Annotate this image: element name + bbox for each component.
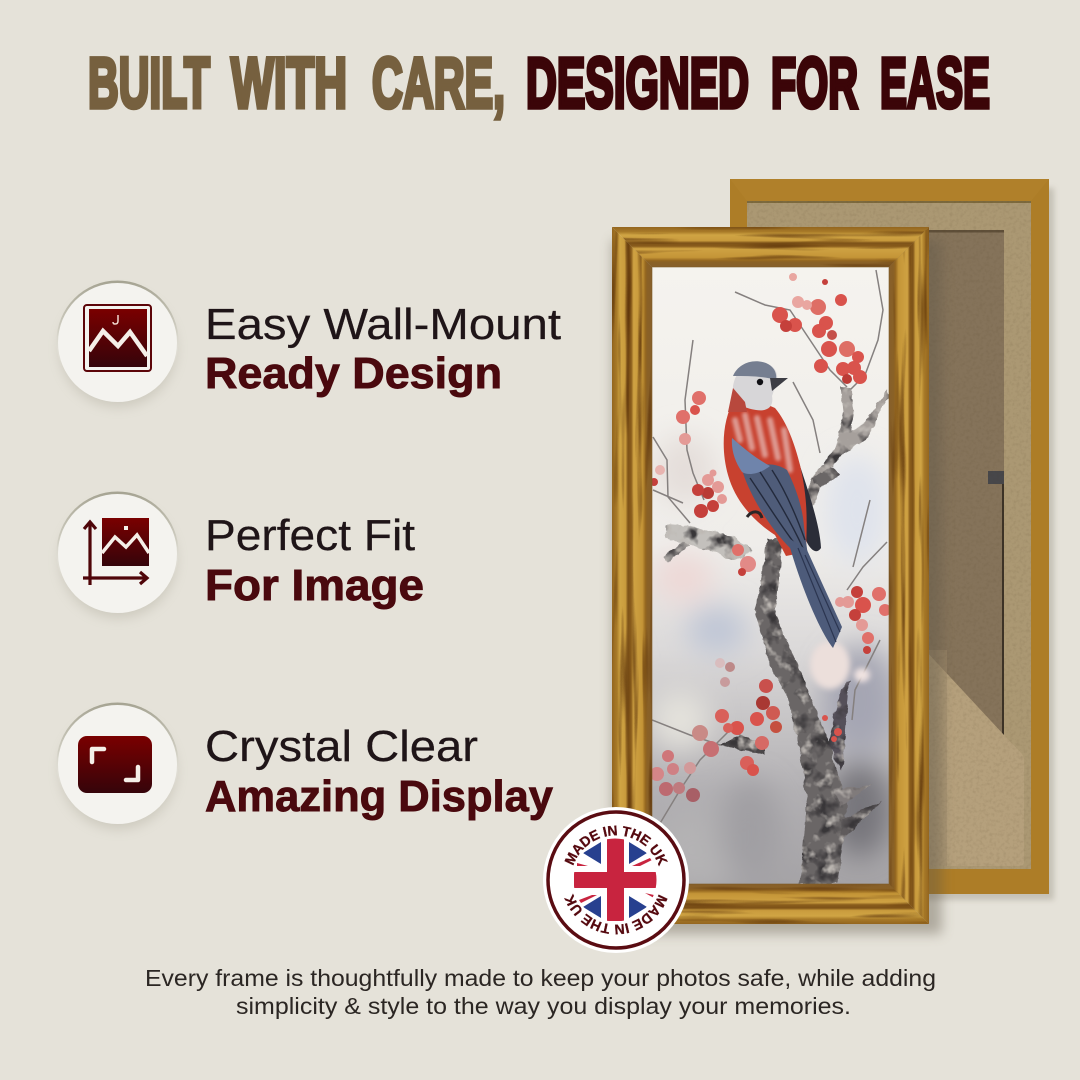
feature: easy wall-mount <box>56 280 561 407</box>
turn clip <box>988 471 1004 484</box>
red berries <box>650 273 891 802</box>
label: ready design: Ready Design <box>205 349 502 398</box>
dark long feather <box>800 466 821 552</box>
back of frame <box>730 179 1054 900</box>
feature: crystal clear <box>56 702 554 829</box>
painting: bird on a berry branch <box>650 267 898 890</box>
front frame with painting <box>612 227 942 934</box>
badge text top: MADE IN THE UK <box>564 825 668 866</box>
icon: image with dimension arrows <box>56 492 178 618</box>
red body <box>724 395 807 556</box>
watercolour washes <box>650 435 898 890</box>
title: BUILT <box>88 45 210 124</box>
painting inner shadow <box>652 267 889 884</box>
title: FOR <box>771 45 858 124</box>
icon: clear display screen <box>56 702 178 829</box>
title <box>88 45 990 124</box>
blue wings <box>743 464 808 556</box>
caption: simplicity & style to the way you display your memories. <box>236 993 851 1019</box>
title: WITH <box>231 45 347 124</box>
flap stand <box>925 650 1024 866</box>
tree trunk and branches <box>663 387 889 884</box>
wooden frame <box>612 227 929 924</box>
backing board <box>747 201 1031 869</box>
pale blossoms <box>810 641 870 689</box>
thin twigs <box>650 270 887 840</box>
label: perfect fit: Perfect Fit <box>205 511 415 560</box>
bird <box>724 361 842 648</box>
title: DESIGNED <box>526 45 749 124</box>
union flag <box>574 838 657 921</box>
badge text bottom: MADE IN THE UK <box>564 894 668 935</box>
label: easy wall-mount: Easy Wall-Mount <box>205 300 561 349</box>
caption: Every frame is thoughtfully made to keep your photos safe, while adding <box>145 965 936 991</box>
title: CARE, <box>372 45 505 124</box>
label: amazing display: Amazing Display <box>205 772 554 821</box>
tail <box>787 537 842 648</box>
label: crystal clear: Crystal Clear <box>205 722 478 771</box>
badge: made in the uk <box>543 807 689 953</box>
recess <box>925 230 1004 740</box>
caption <box>145 965 936 1019</box>
label: for image: For Image <box>205 561 424 610</box>
head <box>733 362 777 410</box>
feature: perfect fit <box>56 492 424 618</box>
icon: wall-mount picture with hook <box>56 280 178 407</box>
title: EASE <box>880 45 990 124</box>
